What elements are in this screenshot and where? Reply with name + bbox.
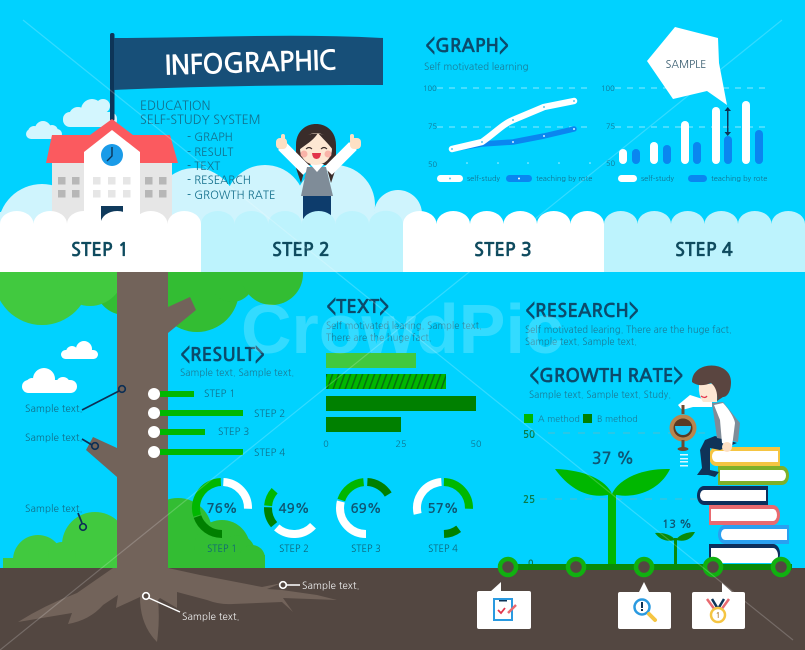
callout: sample (647, 27, 727, 105)
graph heading: <GRAPH> (425, 35, 509, 55)
bar chart (601, 86, 770, 183)
result bars: STEP 3 (218, 427, 249, 437)
line chart: 50 (428, 162, 438, 169)
graph heading: Self motivated learning (424, 61, 529, 72)
research heading (525, 300, 732, 347)
line chart: 100 (423, 86, 437, 93)
background cloud band (0, 165, 422, 272)
donut 49%: 49% (278, 502, 310, 516)
text block: education list: - GRAPH (187, 131, 233, 143)
icon card: medal: 1 (716, 611, 720, 620)
tree callouts: Sample text. (25, 403, 83, 414)
text block: education list: SELF-STUDY SYSTEM (140, 113, 261, 126)
donut 57%: 57% (427, 502, 459, 516)
donut 57% (407, 472, 479, 554)
text block: education list: EDUCATION (140, 99, 210, 112)
text heading: Self motivated learing. Sample text. (326, 322, 482, 331)
text block: education list: - TEXT (187, 160, 220, 172)
root callouts: Sample text. (182, 611, 240, 622)
watermark: CrowdPic (241, 290, 564, 368)
tree foliage (0, 272, 303, 332)
root callouts: Sample text. (302, 580, 360, 591)
line chart (423, 86, 592, 183)
result bars: STEP 4 (254, 448, 285, 458)
tree callouts: Sample text. (25, 432, 83, 443)
result bars: STEP 1 (204, 389, 235, 399)
line chart: teaching by rote (536, 175, 592, 183)
big sprout 37%: 37 % (592, 451, 634, 467)
growth axis (523, 430, 705, 568)
step tabs: STEP 2 (272, 240, 330, 259)
result heading: <RESULT> (180, 344, 265, 364)
callout: sample: SAMPLE (666, 59, 706, 70)
donut 49% (257, 471, 331, 554)
line chart: self-study (467, 175, 501, 183)
growth axis: 0 (528, 559, 533, 568)
growth rate heading: Sample text. Sample text. Study. (529, 391, 671, 400)
growth legend: B method (597, 415, 638, 424)
bushes (3, 498, 265, 568)
ground (0, 568, 805, 650)
bar chart: 75 (606, 124, 615, 131)
text block: education list: - RESEARCH (187, 174, 251, 186)
small clouds (22, 341, 98, 393)
small sprout 13% (655, 518, 695, 566)
line chart: 75 (428, 124, 437, 131)
root callouts (143, 580, 360, 622)
research heading: Sample text. Sample text. (525, 338, 637, 347)
step tabs: STEP 3 (474, 240, 532, 259)
icon card: checklist (477, 582, 531, 629)
research heading: <RESEARCH> (525, 300, 639, 320)
donut 76%: 76% (206, 502, 238, 516)
bar chart: 50 (606, 161, 616, 168)
text heading (326, 296, 482, 343)
big sprout 37% (555, 451, 670, 566)
watering can (670, 405, 696, 466)
icon card: magnifier (618, 582, 671, 629)
donut 69% (333, 475, 399, 554)
growth legend: A method (538, 415, 580, 424)
small clouds behind school (26, 99, 117, 139)
growth rate heading (529, 365, 684, 400)
icon card: medal (692, 583, 745, 629)
growth legend (524, 414, 638, 424)
flag: INFOGRAPHIC (164, 48, 337, 80)
horizontal bar chart: 50 (471, 440, 481, 449)
result heading (180, 344, 294, 378)
bar chart: teaching by rote (711, 175, 767, 183)
text heading: There are the huge fact. (326, 334, 432, 343)
donut 69%: 69% (350, 502, 382, 516)
tree callouts (25, 386, 125, 530)
text block: education list: - GROWTH RATE (187, 189, 275, 201)
horizontal bar chart (323, 353, 481, 449)
stack of books (697, 447, 789, 563)
graph heading (424, 35, 529, 72)
text block: education list (140, 99, 275, 201)
result heading: Sample text. Sample text. (180, 369, 294, 378)
double arrow (724, 107, 731, 136)
bar chart: self-study (641, 175, 675, 183)
donut 57%: STEP 4 (428, 545, 458, 554)
donut 76%: STEP 1 (207, 545, 237, 554)
horizontal bar chart: 25 (396, 440, 406, 449)
girl character (276, 124, 361, 220)
tree trunk and roots (18, 272, 337, 642)
donut 49%: STEP 2 (279, 545, 309, 554)
flag (110, 33, 383, 121)
result bars: STEP 2 (254, 409, 285, 419)
text block: education list: - RESULT (187, 146, 233, 158)
research heading: Self motivated learing. There are the huge fact. (525, 326, 732, 335)
horizontal bar chart: 0 (323, 440, 329, 449)
tree callouts: Sample text. (25, 503, 83, 514)
donut 76% (190, 476, 254, 554)
bar chart: 100 (601, 86, 615, 93)
result bars (148, 388, 285, 458)
ground timeline (498, 559, 792, 575)
step tabs: STEP 4 (675, 240, 733, 259)
step tabs (0, 211, 805, 272)
text heading: <TEXT> (326, 296, 389, 316)
boy watering plants (678, 366, 740, 477)
growth rate heading: <GROWTH RATE> (529, 365, 684, 385)
step tabs: STEP 1 (71, 240, 129, 259)
growth axis: 50 (523, 430, 535, 440)
donut 69%: STEP 3 (351, 545, 381, 554)
growth axis: 25 (523, 495, 535, 505)
school building (46, 119, 178, 228)
donut charts (190, 471, 479, 554)
small sprout 13%: 13 % (662, 518, 692, 530)
